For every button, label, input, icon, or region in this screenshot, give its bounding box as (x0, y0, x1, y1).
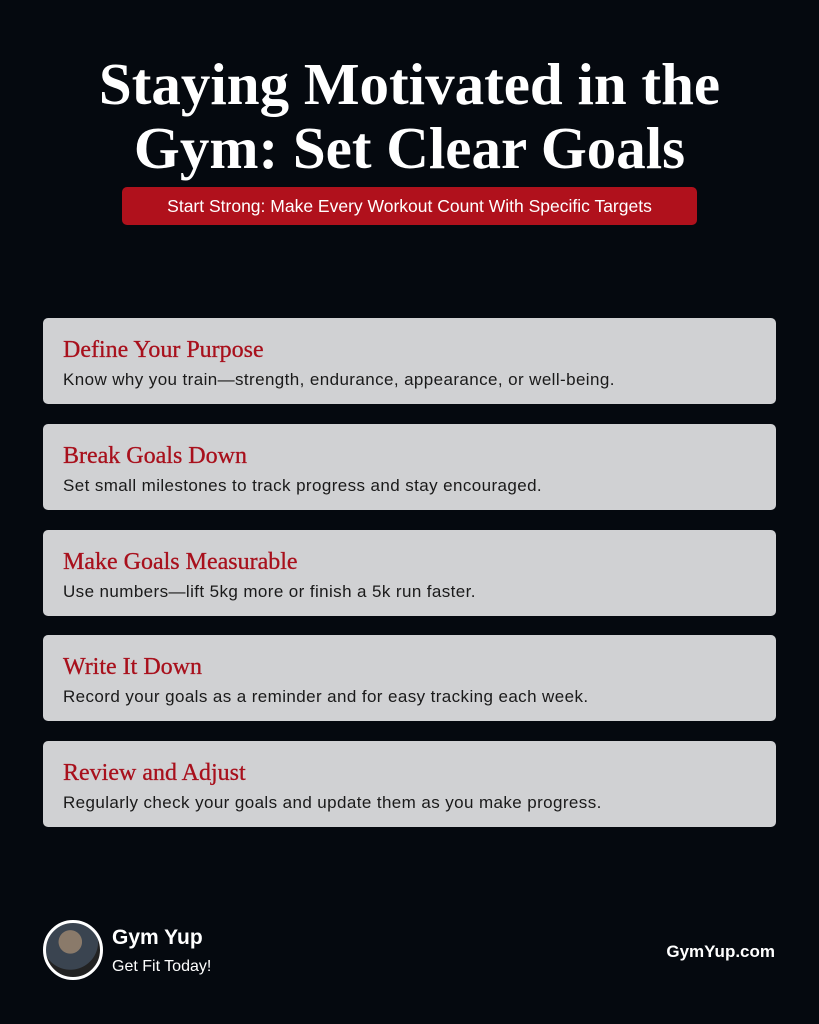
card: break goals down: Set small milestones to track progress and stay encouraged. (63, 476, 542, 495)
card: break goals down (43, 424, 776, 510)
card: write it down (43, 635, 776, 721)
subtitle banner: Start Strong: Make Every Workout Count With Specific Targets (167, 196, 652, 216)
subtitle banner (122, 187, 697, 225)
card: review: Regularly check your goals and update them as you make progress. (63, 793, 602, 812)
tagline: Get Fit Today! (112, 958, 211, 975)
icon: avatar (43, 920, 103, 980)
card: review: Review and Adjust (63, 760, 246, 786)
card: break goals down: Break Goals Down (63, 443, 247, 469)
website: GymYup.com (666, 942, 775, 961)
card: write it down: Record your goals as a reminder and for easy tracking each week. (63, 687, 588, 706)
title (99, 51, 720, 181)
card: define purpose: Define Your Purpose (63, 337, 264, 363)
card: review (43, 741, 776, 827)
card: measurable: Make Goals Measurable (63, 549, 298, 575)
card: define purpose: Know why you train—strength, endurance, appearance, or well-being. (63, 370, 615, 389)
card: write it down: Write It Down (63, 654, 202, 680)
card: define purpose (43, 318, 776, 404)
card: measurable: Use numbers—lift 5kg more or finish a 5k run faster. (63, 582, 476, 601)
card: measurable (43, 530, 776, 616)
title: Staying Motivated in the (99, 51, 720, 117)
brand name: Gym Yup (112, 926, 203, 949)
title: Gym: Set Clear Goals (134, 115, 685, 181)
